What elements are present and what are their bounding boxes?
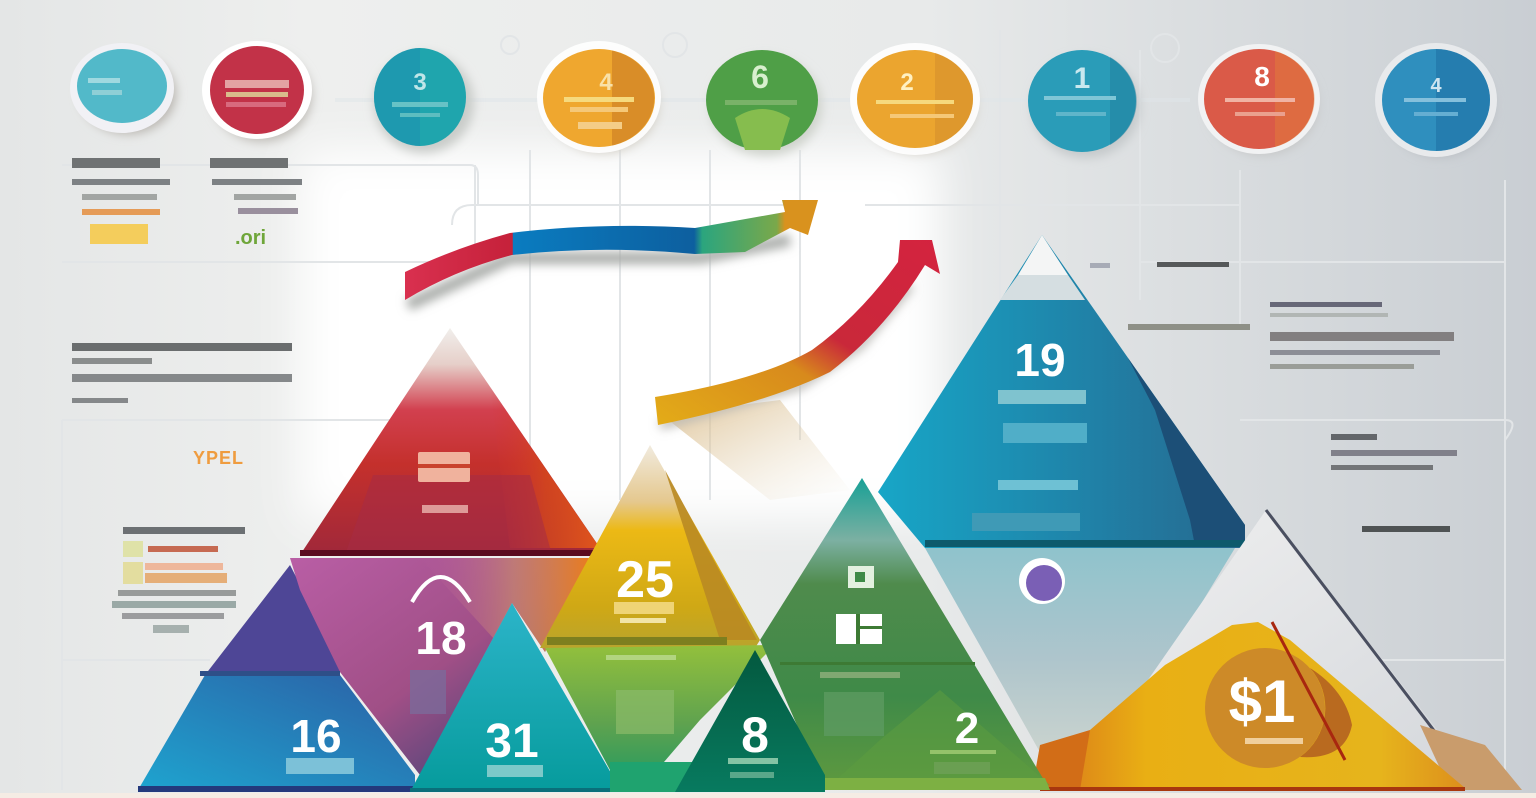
number 16: 16 bbox=[290, 710, 342, 762]
number 2: 2 bbox=[955, 704, 979, 753]
icon row: nine round badges bbox=[70, 41, 1497, 158]
number 25: 25 bbox=[616, 551, 674, 609]
text block: lower left legend bbox=[112, 527, 245, 633]
badge 5 green: 6 bbox=[751, 59, 769, 95]
pyramid: dark green 8 bbox=[610, 650, 825, 792]
icon: small badge bbox=[848, 566, 874, 588]
text block: upper left captions bbox=[72, 158, 302, 249]
pyramid: purple: 18 bbox=[415, 612, 467, 664]
beam behind arrow bbox=[662, 400, 850, 500]
number $1: $1 bbox=[1229, 668, 1295, 735]
text block: upper left captions: .ori bbox=[235, 227, 266, 249]
pyramid: blue 16 bbox=[138, 671, 415, 792]
badge 6 orange bbox=[850, 43, 980, 155]
number 31: 31 bbox=[485, 715, 539, 768]
badge 8 red orange bbox=[1198, 44, 1320, 155]
number 19: 19 bbox=[1014, 334, 1066, 386]
badge 5 green bbox=[706, 50, 822, 156]
pyramid: white and gold bbox=[1032, 510, 1522, 791]
pyramid: blue 19 bbox=[878, 235, 1245, 548]
arrow: multicolour upper arrow bbox=[405, 200, 818, 305]
badge 4 orange: 4 bbox=[599, 69, 613, 96]
badge 3 teal bbox=[374, 48, 474, 153]
badge 4 orange bbox=[537, 41, 661, 153]
text block: upper right bbox=[1090, 262, 1454, 369]
pyramid: green bbox=[760, 478, 1050, 790]
pyramid: red bbox=[300, 328, 600, 556]
number 8: 8 bbox=[741, 707, 769, 763]
pyramid: yellow 25 bbox=[540, 445, 760, 648]
icon: purple dot bbox=[1019, 558, 1065, 604]
pyramid: teal 31 bbox=[410, 603, 618, 792]
badge 1 teal bbox=[70, 43, 176, 134]
pyramid: purple bbox=[205, 558, 590, 775]
text block: mid right bbox=[1331, 434, 1457, 532]
icon: ledger bbox=[836, 614, 882, 644]
badge 3 teal: 3 bbox=[413, 69, 427, 96]
badge 7 blue bbox=[1028, 50, 1140, 158]
icon: tag bbox=[418, 452, 470, 482]
panel: pale blue slab bbox=[925, 548, 1235, 770]
badge 7 blue: 1 bbox=[1074, 62, 1090, 95]
badge 9 blue bbox=[1375, 43, 1497, 157]
number 18 with arc bbox=[412, 577, 470, 602]
badge 8 red orange: 8 bbox=[1254, 61, 1270, 92]
badge 6 orange: 2 bbox=[900, 69, 914, 96]
pyramid: light green inverted bbox=[545, 645, 775, 790]
text block: mid left bbox=[72, 343, 292, 403]
badge 9 blue: 4 bbox=[1430, 75, 1442, 97]
arrow: red rising arrow bbox=[655, 240, 940, 425]
badge 2 red bbox=[202, 41, 312, 142]
label: orange tag: YPEL bbox=[193, 448, 244, 468]
